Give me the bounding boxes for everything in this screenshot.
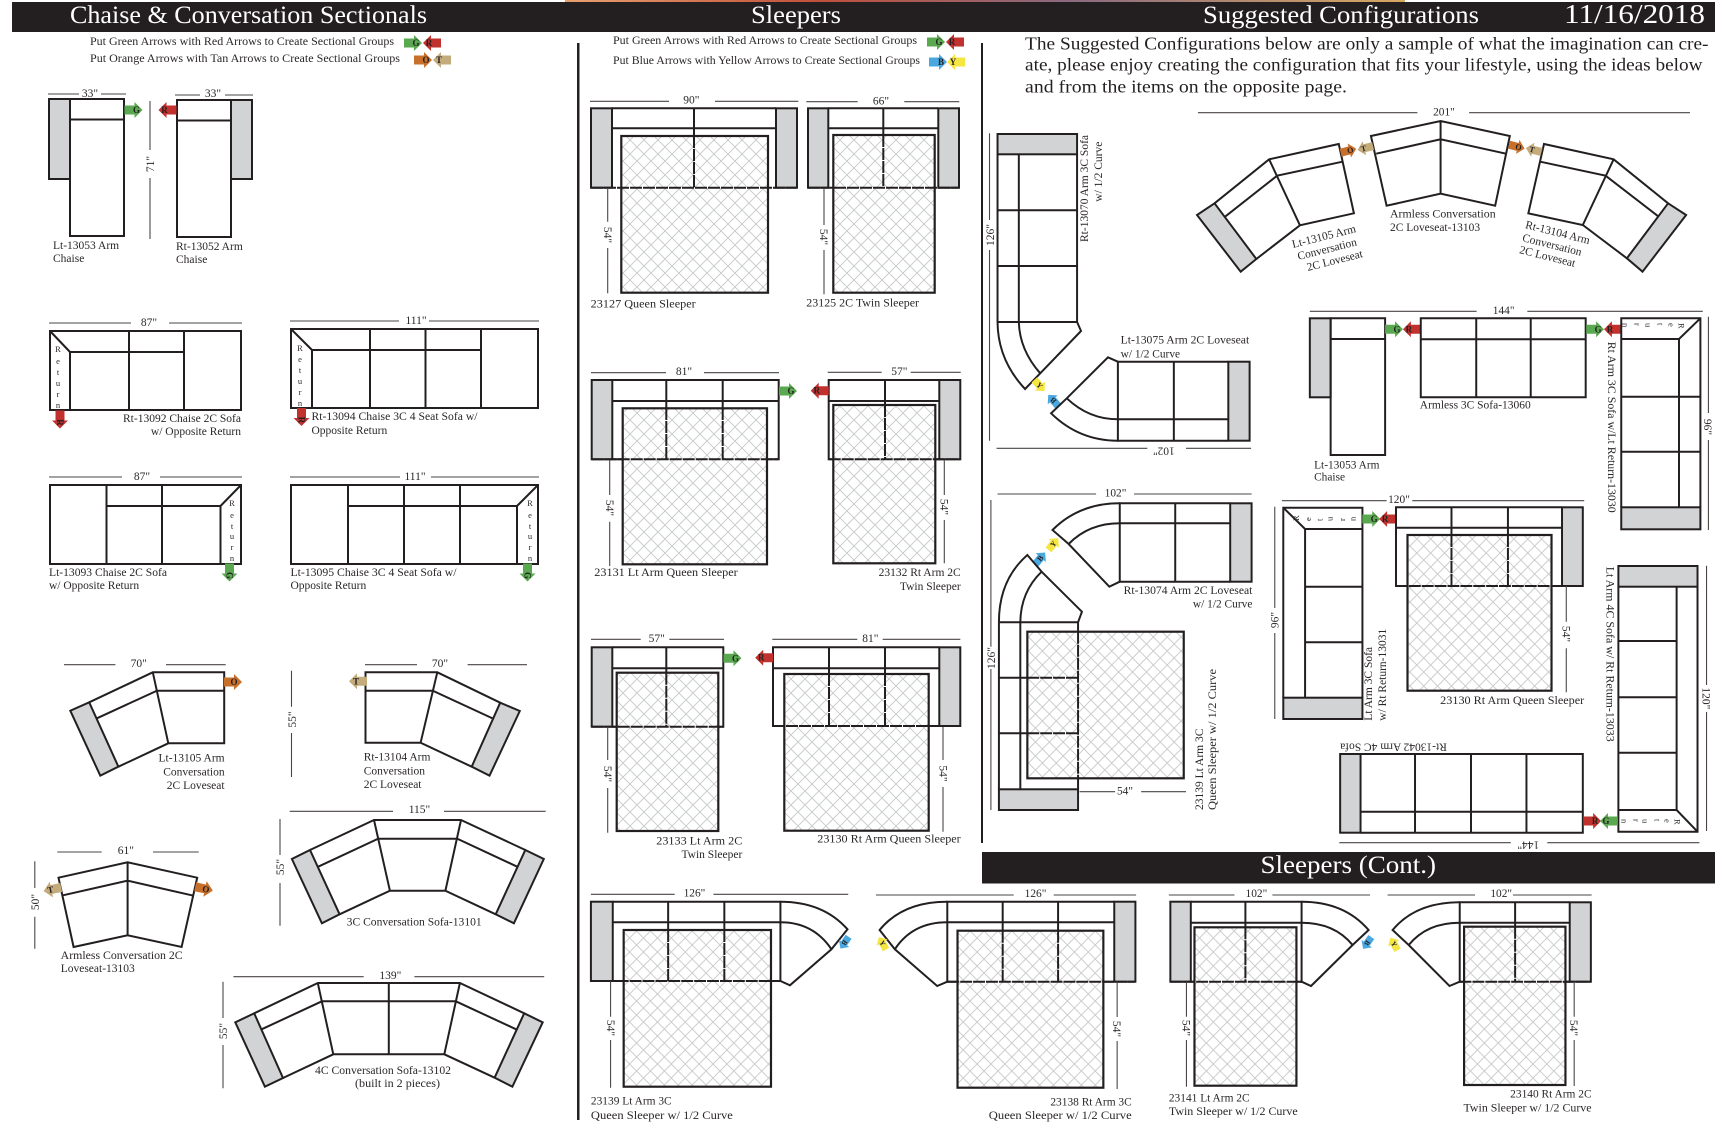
configuration: Rt-13070 and Lt-13075 with half curve: Lt-13075 Arm 2C Loveseat <box>1121 334 1250 346</box>
23127 queen sleeper <box>590 94 798 311</box>
Lt-13105 arm conversation 2C loveseat: 70" <box>131 658 147 670</box>
Rt-13052 arm chaise: Chaise <box>176 254 207 266</box>
23125 2C twin sleeper: 54" <box>817 229 829 245</box>
Lt-13053 arm chaise: 33" <box>82 88 98 100</box>
23133 lt arm 2C twin sleeper: Twin Sleeper <box>681 849 742 861</box>
configuration: 201 inch curved conversation: 2C Loveseat-13103 <box>1390 222 1480 234</box>
configuration: 23139 sleeper with Rt-13074 loveseat: 23139 Lt Arm 3C <box>1194 729 1206 810</box>
legend: green red and orange tan arrows: T <box>436 55 442 65</box>
Lt-13093 chaise 2C sofa: w/ Opposite Return <box>49 580 139 592</box>
configuration: Rt-13042 4C sofa with Lt arm 4C sofa: R <box>1592 816 1599 826</box>
panel: sleepers continued <box>591 852 1715 1122</box>
configuration: 201 inch curved conversation: Conversation <box>1296 236 1358 263</box>
Lt-13093 chaise 2C sofa: 87" <box>134 471 150 483</box>
23131 lt arm queen sleeper <box>591 366 797 579</box>
configuration: 23139 sleeper with Rt-13074 loveseat: B <box>1035 553 1045 563</box>
configuration: 201 inch curved conversation: Rt-13104 Arm <box>1524 219 1591 247</box>
23141 lt arm 2C twin sleeper with half curve: 23141 Lt Arm 2C <box>1169 1093 1250 1105</box>
configuration: 201 inch curved conversation: Conversation <box>1521 232 1583 259</box>
legend: green red and blue yellow arrows: G <box>935 37 943 47</box>
configuration: 144 inch chaise armless sofa and return: Lt-13053 Arm <box>1314 459 1380 471</box>
configuration: 23139 sleeper with Rt-13074 loveseat: 54" <box>1117 785 1133 798</box>
Rt-13052 arm chaise: Rt-13052 Arm <box>176 241 243 253</box>
configuration: Rt-13042 4C sofa with Lt arm 4C sofa: Return <box>1620 819 1682 825</box>
configuration: 201 inch curved conversation: O <box>1346 145 1354 156</box>
configuration: Rt-13042 4C sofa with Lt arm 4C sofa: Lt Arm 4C Sofa w/ Rt Return-13033 <box>1604 567 1615 742</box>
legend: green red and blue yellow arrows <box>613 34 965 70</box>
configuration: 23139 sleeper with Rt-13074 loveseat <box>986 487 1253 810</box>
legend: green red and orange tan arrows: R <box>426 38 433 48</box>
legend: green red and blue yellow arrows: B <box>938 57 944 67</box>
23138 rt arm 3C queen sleeper with half curve: 126" <box>1025 888 1046 900</box>
configuration: Lt arm 3C sofa with 23130 sleeper: 23130 Rt Arm Queen Sleeper <box>1440 695 1584 707</box>
configuration: 144 inch chaise armless sofa and return: Return <box>1621 323 1686 329</box>
Rt-13104 arm conversation 2C loveseat: 70" <box>432 658 448 670</box>
23133 lt arm 2C twin sleeper <box>591 633 743 861</box>
Lt-13105 arm conversation 2C loveseat: 2C Loveseat <box>167 780 225 792</box>
header: Sleepers (Cont.) <box>982 852 1715 884</box>
Rt-13094 chaise 3C 4 seat sofa: R <box>296 417 306 424</box>
configuration: Lt arm 3C sofa with 23130 sleeper: Return <box>1291 515 1357 521</box>
armless conversation 2C loveseat 13103: O <box>201 883 210 895</box>
configuration: Lt arm 3C sofa with 23130 sleeper: R <box>1382 514 1389 524</box>
configuration: Rt-13042 4C sofa with Lt arm 4C sofa: 144" <box>1517 838 1539 851</box>
23141 lt arm 2C twin sleeper with half curve <box>1169 888 1377 1118</box>
23140 rt arm 2C twin sleeper with half curve: 23140 Rt Arm 2C <box>1510 1089 1592 1101</box>
configuration: Lt arm 3C sofa with 23130 sleeper: G <box>1371 514 1378 524</box>
configuration: 144 inch chaise armless sofa and return: Chaise <box>1314 472 1345 484</box>
armless conversation 2C loveseat 13103: 61" <box>118 845 134 857</box>
title: Chaise & Conversation Sectionals: Chaise & Conversation Sectionals <box>70 2 427 29</box>
23130 rt arm queen sleeper: 23130 Rt Arm Queen Sleeper <box>817 834 961 846</box>
23140 rt arm 2C twin sleeper with half curve: 102" <box>1490 888 1512 900</box>
23127 queen sleeper: 23127 Queen Sleeper <box>591 299 696 311</box>
23139 lt arm 3C queen sleeper with half curve: B <box>839 938 849 947</box>
Lt-13093 chaise 2C sofa: Return <box>229 498 235 563</box>
23141 lt arm 2C twin sleeper with half curve: 54" <box>1180 1020 1192 1036</box>
23125 2C twin sleeper: 23125 2C Twin Sleeper <box>806 298 919 310</box>
4C conversation sofa 13102: 55" <box>218 1023 230 1039</box>
3C conversation sofa 13101: 3C Conversation Sofa-13101 <box>347 917 482 929</box>
23125 2C twin sleeper <box>806 96 959 310</box>
legend: green red and blue yellow arrows: Put Blue Arrows with Yellow Arrows to Create Sectional Groups <box>613 55 921 67</box>
configuration: 144 inch chaise armless sofa and return: R <box>1607 324 1614 334</box>
Rt-13104 arm conversation 2C loveseat: 2C Loveseat <box>364 779 422 791</box>
configuration: Lt arm 3C sofa with 23130 sleeper: 120" <box>1388 494 1410 506</box>
legend: green red and orange tan arrows: G <box>412 38 420 48</box>
configuration: 201 inch curved conversation: T <box>1528 145 1536 155</box>
panel: suggested configurations <box>985 33 1713 851</box>
title: Suggested Configurations: Suggested Configurations <box>1203 2 1479 29</box>
configuration: 201 inch curved conversation: 201" <box>1433 106 1455 119</box>
4C conversation sofa 13102: (built in 2 pieces) <box>355 1078 440 1090</box>
configuration: Rt-13042 4C sofa with Lt arm 4C sofa: G <box>1603 816 1610 826</box>
configuration: 201 inch curved conversation: T <box>1360 143 1368 154</box>
legend: green red and blue yellow arrows: Put Green Arrows with Red Arrows to Create Sectional Groups <box>613 35 918 47</box>
Rt-13092 chaise 2C sofa: Rt-13092 Chaise 2C Sofa <box>123 413 241 425</box>
23140 rt arm 2C twin sleeper with half curve: 54" <box>1567 1020 1579 1036</box>
Lt-13053 arm chaise: G <box>133 105 140 115</box>
configuration: Rt-13042 4C sofa with Lt arm 4C sofa: Rt-13042 Arm 4C Sofa <box>1340 740 1447 752</box>
configuration: 23139 sleeper with Rt-13074 loveseat: Queen Sleeper w/ 1/2 Curve <box>1207 669 1219 810</box>
legend: green red and orange tan arrows: Put Green Arrows with Red Arrows to Create Sectional Groups <box>90 36 395 48</box>
Rt-13094 chaise 3C 4 seat sofa: Return <box>297 343 303 408</box>
Rt-13052 arm chaise: R <box>161 105 168 115</box>
Rt-13094 chaise 3C 4 seat sofa: 111" <box>405 315 427 327</box>
23138 rt arm 3C queen sleeper with half curve: Queen Sleeper w/ 1/2 Curve <box>989 1110 1132 1122</box>
23130 rt arm queen sleeper: 54" <box>936 765 948 782</box>
Lt-13095 chaise 3C 4 seat sofa: G <box>522 572 532 579</box>
Rt-13052 arm chaise <box>145 88 253 266</box>
4C conversation sofa 13102 <box>218 970 544 1090</box>
configuration: 23139 sleeper with Rt-13074 loveseat: 102" <box>1105 487 1126 500</box>
Lt-13105 arm conversation 2C loveseat: O <box>230 677 238 687</box>
Rt-13052 arm chaise: 71" <box>145 156 157 172</box>
configuration: 201 inch curved conversation: Lt-13105 Arm <box>1291 223 1357 251</box>
23131 lt arm queen sleeper: 23131 Lt Arm Queen Sleeper <box>594 567 738 579</box>
23132 rt arm 2C twin sleeper: R <box>813 386 820 396</box>
23138 rt arm 3C queen sleeper with half curve <box>873 888 1136 1122</box>
configuration: 23139 sleeper with Rt-13074 loveseat: w/ 1/2 Curve <box>1193 598 1252 610</box>
Lt-13095 chaise 3C 4 seat sofa: Return <box>527 498 533 563</box>
configuration: Rt-13070 and Lt-13075 with half curve: w/ 1/2 Curve <box>1121 348 1180 360</box>
Rt-13052 arm chaise: 33" <box>205 88 221 100</box>
panel: sleepers <box>590 34 965 861</box>
3C conversation sofa 13101 <box>275 804 546 929</box>
23141 lt arm 2C twin sleeper with half curve: B <box>1362 939 1372 947</box>
Rt-13104 arm conversation 2C loveseat: Rt-13104 Arm <box>364 752 431 764</box>
23133 lt arm 2C twin sleeper: 57" <box>649 633 665 645</box>
23127 queen sleeper: 54" <box>601 227 613 243</box>
23139 lt arm 3C queen sleeper with half curve: 54" <box>604 1020 616 1036</box>
header: Sleepers (Cont.): Sleepers (Cont.) <box>1260 852 1436 879</box>
configuration: 201 inch curved conversation: O <box>1514 142 1523 152</box>
configuration: Lt arm 3C sofa with 23130 sleeper: 54" <box>1559 626 1571 642</box>
Rt-13092 chaise 2C sofa: Return <box>55 344 61 410</box>
Rt-13094 chaise 3C 4 seat sofa <box>290 315 539 437</box>
Lt-13093 chaise 2C sofa: Lt-13093 Chaise 2C Sofa <box>49 567 167 579</box>
armless conversation 2C loveseat 13103: Loveseat-13103 <box>61 963 135 975</box>
armless conversation 2C loveseat 13103: Armless Conversation 2C <box>61 950 183 962</box>
configuration: Lt arm 3C sofa with 23130 sleeper: 96" <box>1270 612 1282 628</box>
configuration: 144 inch chaise armless sofa and return: G <box>1394 324 1401 334</box>
Rt-13094 chaise 3C 4 seat sofa: Rt-13094 Chaise 3C 4 Seat Sofa w/ <box>312 411 478 423</box>
23140 rt arm 2C twin sleeper with half curve <box>1385 888 1592 1115</box>
configuration: 201 inch curved conversation <box>1197 106 1690 274</box>
intro paragraph: and from the items on the opposite page. <box>1025 77 1347 97</box>
23130 rt arm queen sleeper: 81" <box>862 633 878 645</box>
3C conversation sofa 13101: 55" <box>275 859 287 875</box>
Rt-13104 arm conversation 2C loveseat: Conversation <box>364 766 425 778</box>
Lt-13095 chaise 3C 4 seat sofa: 111" <box>404 471 426 483</box>
configuration: Rt-13042 4C sofa with Lt arm 4C sofa <box>1339 566 1712 851</box>
23131 lt arm queen sleeper: 54" <box>603 500 615 516</box>
configuration: Lt arm 3C sofa with 23130 sleeper <box>1270 494 1584 721</box>
Rt-13092 chaise 2C sofa: R <box>55 419 65 426</box>
configuration: 144 inch chaise armless sofa and return: Armless 3C Sofa-13060 <box>1420 399 1531 411</box>
23139 lt arm 3C queen sleeper with half curve: 126" <box>684 887 705 900</box>
Lt-13093 chaise 2C sofa: G <box>224 572 234 579</box>
23139 lt arm 3C queen sleeper with half curve <box>591 887 854 1122</box>
Rt-13104 arm conversation 2C loveseat: T <box>353 676 359 686</box>
Lt-13095 chaise 3C 4 seat sofa: Opposite Return <box>290 580 366 592</box>
Lt-13093 chaise 2C sofa <box>49 471 242 592</box>
configuration: 144 inch chaise armless sofa and return: 96" <box>1701 419 1713 435</box>
Rt-13092 chaise 2C sofa: w/ Opposite Return <box>151 426 241 438</box>
23133 lt arm 2C twin sleeper: 54" <box>601 766 613 782</box>
Rt-13092 chaise 2C sofa <box>49 317 242 438</box>
legend: green red and blue yellow arrows: R <box>949 37 956 47</box>
header bar <box>12 0 1715 32</box>
configuration: Rt-13070 and Lt-13075 with half curve: B <box>1048 396 1058 405</box>
23132 rt arm 2C twin sleeper <box>811 366 961 593</box>
23132 rt arm 2C twin sleeper: 57" <box>891 366 907 378</box>
Lt-13105 arm conversation 2C loveseat <box>64 658 242 792</box>
configuration: 23139 sleeper with Rt-13074 loveseat: Y <box>1048 539 1059 549</box>
23138 rt arm 3C queen sleeper with half curve: 23138 Rt Arm 3C <box>1050 1096 1132 1108</box>
title: Sleepers: Sleepers <box>751 2 841 29</box>
Rt-13092 chaise 2C sofa: 87" <box>141 317 157 329</box>
Lt-13053 arm chaise: Chaise <box>53 253 84 265</box>
configuration: Lt arm 3C sofa with 23130 sleeper: w/ Rt Return-13031 <box>1377 628 1389 721</box>
configuration: Rt-13070 and Lt-13075 with half curve <box>985 133 1251 457</box>
Rt-13104 arm conversation 2C loveseat <box>287 658 527 791</box>
configuration: Rt-13070 and Lt-13075 with half curve: Rt-13070 Arm 3C Sofa <box>1079 135 1091 242</box>
23130 rt arm queen sleeper <box>755 633 961 846</box>
23138 rt arm 3C queen sleeper with half curve: 54" <box>1110 1021 1122 1037</box>
configuration: 23139 sleeper with Rt-13074 loveseat: 126" <box>986 647 998 669</box>
4C conversation sofa 13102: 139" <box>379 970 401 982</box>
column divider right <box>981 43 983 843</box>
23140 rt arm 2C twin sleeper with half curve: Twin Sleeper w/ 1/2 Curve <box>1463 1103 1592 1115</box>
configuration: Rt-13070 and Lt-13075 with half curve: w/ 1/2 Curve <box>1093 142 1105 202</box>
23132 rt arm 2C twin sleeper: Twin Sleeper <box>900 581 961 593</box>
Rt-13104 arm conversation 2C loveseat: 55" <box>287 711 299 728</box>
panel: chaise and conversation sectionals <box>30 35 546 1090</box>
armless conversation 2C loveseat 13103 <box>30 845 214 975</box>
legend: green red and orange tan arrows: Put Orange Arrows with Tan Arrows to Create Sectional Groups <box>90 53 401 65</box>
23130 rt arm queen sleeper: R <box>758 653 765 663</box>
legend: green red and blue yellow arrows: Y <box>950 57 957 67</box>
intro paragraph: The Suggested Configurations below are only a sample of what the imagination can cre- <box>1025 33 1709 53</box>
intro paragraph <box>1025 33 1709 97</box>
23139 lt arm 3C queen sleeper with half curve: Queen Sleeper w/ 1/2 Curve <box>591 1110 733 1122</box>
configuration: 201 inch curved conversation: Armless Conversation <box>1390 208 1496 220</box>
23139 lt arm 3C queen sleeper with half curve: 23139 Lt Arm 3C <box>591 1095 672 1107</box>
Lt-13053 arm chaise: Lt-13053 Arm <box>53 240 119 252</box>
Lt-13095 chaise 3C 4 seat sofa <box>290 471 539 592</box>
configuration: 201 inch curved conversation: 2C Loveseat <box>1306 248 1365 274</box>
Lt-13095 chaise 3C 4 seat sofa: Lt-13095 Chaise 3C 4 Seat Sofa w/ <box>290 567 457 579</box>
23132 rt arm 2C twin sleeper: 23132 Rt Arm 2C <box>879 567 961 579</box>
intro paragraph: ate, please enjoy creating the configuration that fits your lifestyle, using the ideas below <box>1025 55 1703 75</box>
configuration: 23139 sleeper with Rt-13074 loveseat: Rt-13074 Arm 2C Loveseat <box>1124 585 1253 597</box>
23141 lt arm 2C twin sleeper with half curve: 102" <box>1246 888 1267 900</box>
configuration: 144 inch chaise armless sofa and return: 144" <box>1493 305 1515 317</box>
23140 rt arm 2C twin sleeper with half curve: Y <box>1389 940 1399 949</box>
23138 rt arm 3C queen sleeper with half curve: Y <box>877 939 887 948</box>
configuration: 144 inch chaise armless sofa and return: Rt Arm 3C Sofa w/Lt Return-13030 <box>1605 342 1617 513</box>
configuration: 201 inch curved conversation: 2C Loveseat <box>1518 244 1577 270</box>
Lt-13105 arm conversation 2C loveseat: Conversation <box>163 767 225 779</box>
configuration: 144 inch chaise armless sofa and return: R <box>1406 324 1413 334</box>
column divider left <box>577 43 580 1120</box>
4C conversation sofa 13102: 4C Conversation Sofa-13102 <box>315 1065 451 1077</box>
legend: green red and orange tan arrows: O <box>422 55 430 65</box>
23133 lt arm 2C twin sleeper: G <box>732 653 739 663</box>
configuration: Rt-13070 and Lt-13075 with half curve: 126" <box>985 224 997 246</box>
23125 2C twin sleeper: 66" <box>873 96 889 108</box>
Lt-13053 arm chaise <box>48 88 142 265</box>
armless conversation 2C loveseat 13103: 50" <box>30 894 42 910</box>
configuration: Rt-13070 and Lt-13075 with half curve: Y <box>1034 380 1045 391</box>
3C conversation sofa 13101: 115" <box>409 804 430 816</box>
Lt-13105 arm conversation 2C loveseat: Lt-13105 Arm <box>158 753 225 765</box>
configuration: Rt-13070 and Lt-13075 with half curve: 102" <box>1153 444 1175 457</box>
configuration: 144 inch chaise armless sofa and return: G <box>1595 324 1602 334</box>
Rt-13094 chaise 3C 4 seat sofa: Opposite Return <box>312 425 387 437</box>
23132 rt arm 2C twin sleeper: 54" <box>938 499 950 515</box>
configuration: 144 inch chaise armless sofa and return <box>1310 305 1713 530</box>
23131 lt arm queen sleeper: G <box>787 386 795 396</box>
legend: green red and orange tan arrows <box>90 35 451 68</box>
23127 queen sleeper: 90" <box>683 94 699 106</box>
configuration: Rt-13042 4C sofa with Lt arm 4C sofa: 120" <box>1700 687 1712 709</box>
23141 lt arm 2C twin sleeper with half curve: Twin Sleeper w/ 1/2 Curve <box>1169 1106 1298 1118</box>
configuration: Lt arm 3C sofa with 23130 sleeper: Lt Arm 3C Sofa <box>1363 647 1375 721</box>
23131 lt arm queen sleeper: 81" <box>676 366 692 378</box>
23133 lt arm 2C twin sleeper: 23133 Lt Arm 2C <box>656 835 743 847</box>
armless conversation 2C loveseat 13103: T <box>46 884 54 895</box>
